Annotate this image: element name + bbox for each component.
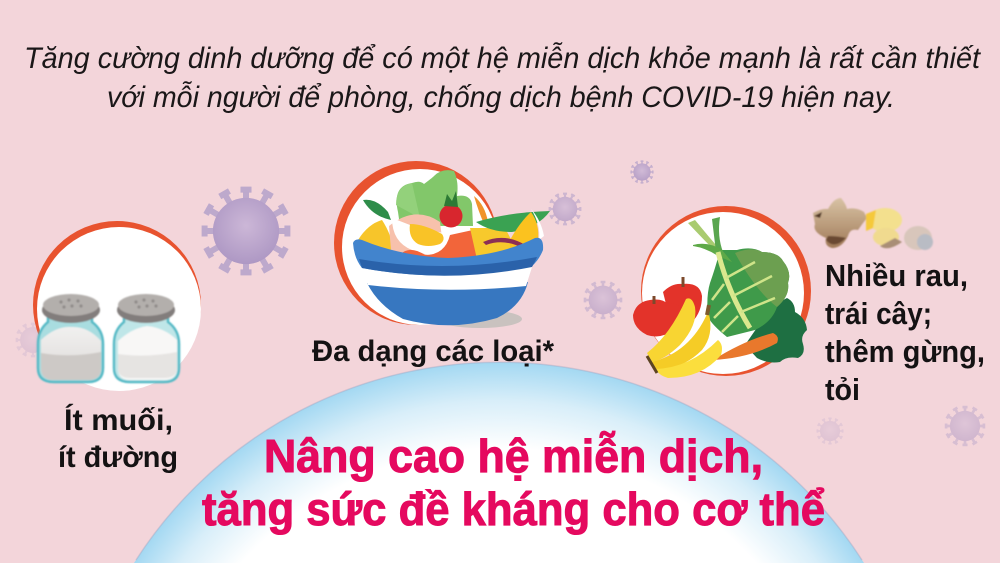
icon: carrot bbox=[713, 333, 778, 360]
circle badge bbox=[334, 161, 498, 325]
panel: vegetables and fruit bbox=[633, 206, 811, 378]
title: tăng sức đề kháng cho cơ thể bbox=[202, 483, 825, 535]
title bbox=[202, 430, 825, 535]
icon: salt jar bbox=[38, 294, 103, 382]
icon: dark greens bbox=[745, 298, 807, 362]
icon: virus middle right bbox=[585, 282, 621, 318]
circle badge bbox=[33, 221, 201, 391]
circle badge bbox=[641, 206, 811, 376]
label: vegetables and fruit: Nhiều rau, bbox=[825, 258, 968, 293]
label: vegetables and fruit: trái cây; bbox=[825, 296, 932, 331]
label: salt and sugar: ít đường bbox=[58, 441, 178, 474]
icon: bananas bbox=[647, 298, 722, 378]
icon: faint virus bottom bbox=[817, 418, 843, 444]
icon: small virus top bbox=[631, 161, 653, 183]
bowl bbox=[353, 238, 543, 325]
panel: mixed food bowl bbox=[334, 161, 550, 328]
panel: salt and sugar bbox=[33, 221, 201, 391]
label: salt and sugar bbox=[58, 403, 178, 474]
icon: virus behind jars bbox=[16, 323, 50, 357]
icon: apples bbox=[633, 277, 702, 336]
bowl shadow bbox=[438, 310, 522, 328]
food bbox=[358, 170, 550, 264]
icon: virus bottom right bbox=[946, 407, 984, 445]
intro text: Tăng cường dinh dưỡng để có một hệ miễn dịch khỏe mạnh là rất cần thiết bbox=[24, 42, 982, 75]
icon: large virus bbox=[204, 189, 288, 273]
title: Nâng cao hệ miễn dịch, bbox=[264, 430, 763, 482]
icon: lettuce bbox=[688, 217, 789, 337]
label: vegetables and fruit bbox=[825, 258, 985, 407]
label: vegetables and fruit: thêm gừng, bbox=[825, 334, 985, 369]
intro text bbox=[24, 42, 982, 114]
intro text: với mỗi người để phòng, chống dịch bệnh COVID-19 hiện nay. bbox=[107, 81, 895, 114]
label: variety: Đa dạng các loại* bbox=[312, 335, 554, 368]
icon: virus near bowl bbox=[549, 193, 581, 225]
dome bbox=[134, 362, 864, 563]
icon: ginger and garlic bbox=[813, 198, 933, 250]
label: salt and sugar: Ít muối, bbox=[64, 403, 173, 437]
icon: sugar jar bbox=[114, 294, 179, 382]
label: vegetables and fruit: tỏi bbox=[825, 372, 860, 407]
